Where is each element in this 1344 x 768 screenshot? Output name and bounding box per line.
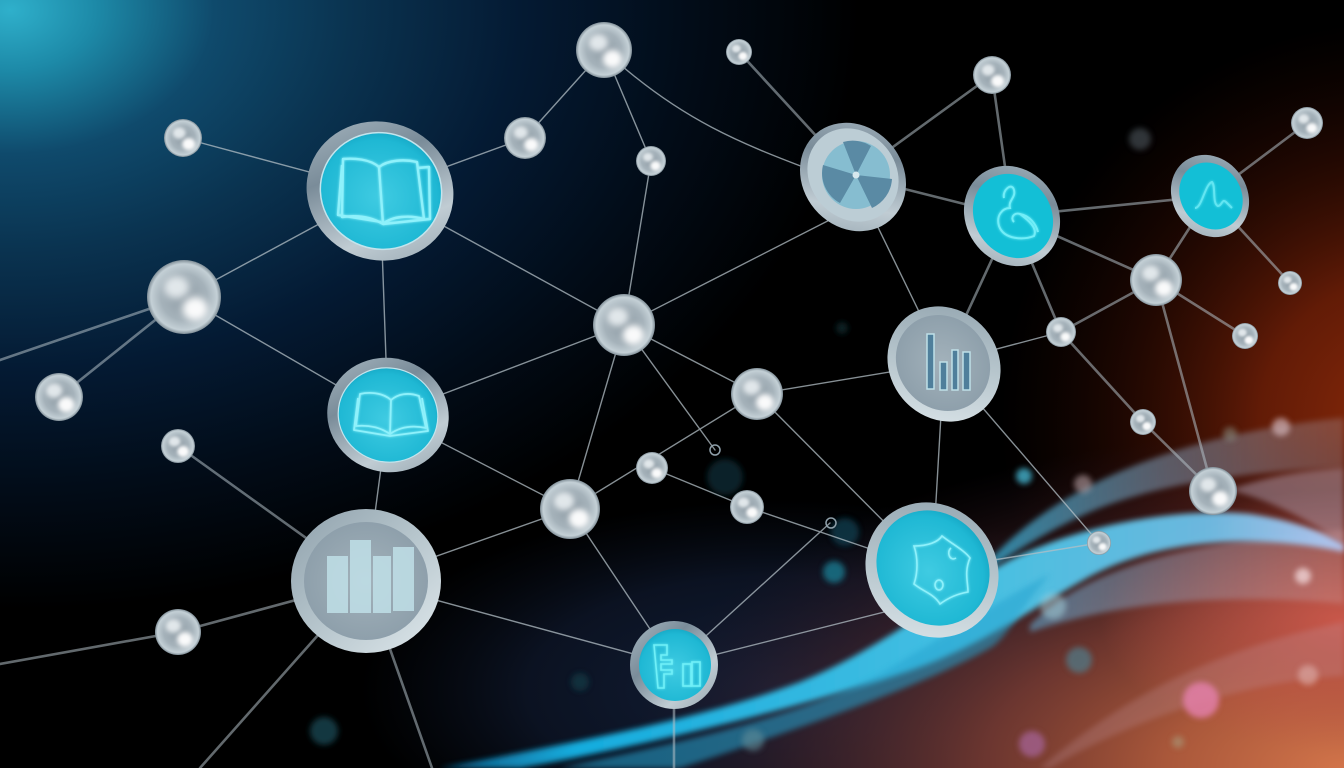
flowing waves	[440, 418, 1344, 768]
icon node: small teal wave glyph	[1155, 140, 1265, 252]
upper faded wave	[985, 418, 1344, 572]
icon: bars	[327, 540, 414, 613]
wide blue wave	[440, 513, 1344, 768]
lower teal wave	[560, 574, 1050, 768]
icon: peak line	[1195, 182, 1232, 208]
icon node: teal chart glyph	[630, 621, 718, 709]
icon: curled symbol	[998, 187, 1038, 238]
icon: radial segments	[822, 141, 892, 209]
icon node: teal shield shape	[838, 475, 1026, 665]
icon node: gray bar chart	[291, 509, 441, 653]
icon: outlined bars	[654, 645, 700, 688]
thin lower right arc	[1040, 622, 1344, 768]
icon node: gray bars right	[864, 283, 1024, 445]
open ring connector ends	[710, 445, 836, 528]
icon: book	[354, 393, 428, 436]
right faded wave	[1230, 468, 1344, 545]
icon: book	[338, 159, 430, 224]
icon node: teal wheelchair glyph	[944, 147, 1080, 285]
icon node: medium open book	[314, 344, 462, 486]
icon: bars	[927, 334, 970, 390]
icon: outlined shield	[914, 536, 970, 604]
bokeh particles	[310, 128, 1318, 757]
mid muted wave	[1030, 530, 1344, 632]
icon node: gray radial	[778, 101, 928, 253]
small metallic nodes	[35, 22, 1323, 655]
icon node: large open book	[287, 101, 473, 281]
